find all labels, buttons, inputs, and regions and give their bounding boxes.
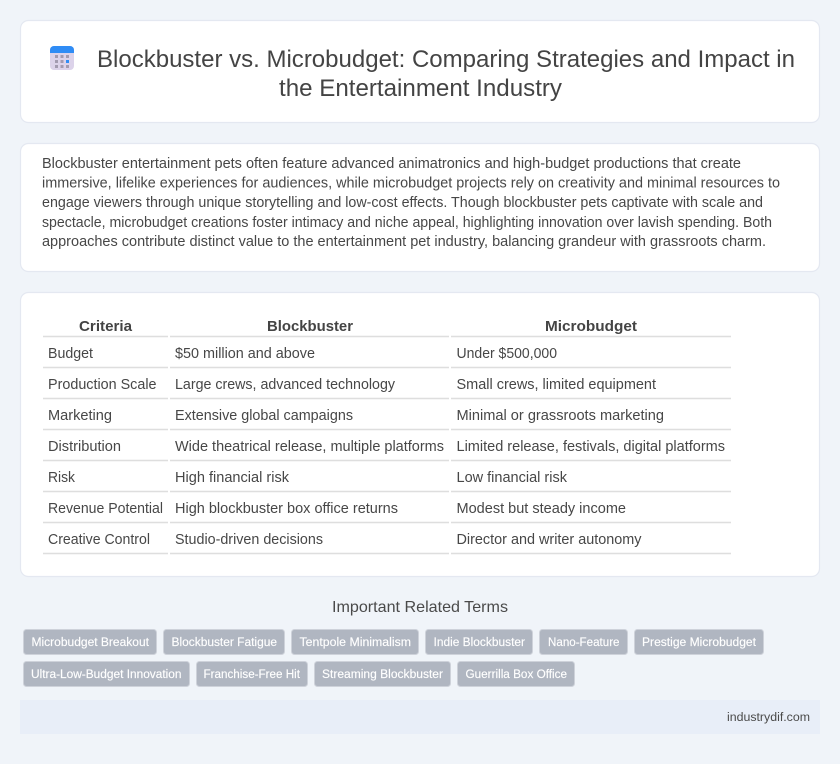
intro paragraph: spectacle, microbudget creations foster intimacy and niche appeal, highlighting innovation over lavish spending. Both — [42, 215, 772, 231]
row: revenue potential: Modest but steady income — [456, 501, 626, 517]
row: budget: $50 million and above — [175, 346, 315, 362]
row: creative control: Director and writer autonomy — [456, 532, 642, 548]
related term tags: Streaming Blockbuster — [322, 667, 443, 681]
icon: calendar — [50, 46, 74, 70]
row: revenue potential: High blockbuster box office returns — [175, 501, 398, 517]
intro paragraph — [42, 156, 780, 250]
row: budget: Budget — [48, 346, 93, 362]
row: production scale: Small crews, limited equipment — [456, 377, 656, 393]
row: creative control: Studio-driven decisions — [175, 532, 323, 548]
row: production scale — [48, 377, 656, 393]
footer bar: industrydif.com — [727, 710, 810, 724]
related term tags: Blockbuster Fatigue — [172, 635, 277, 649]
row: distribution — [48, 439, 725, 455]
related term tags — [24, 630, 764, 686]
related term tags: Tentpole Minimalism — [300, 635, 411, 649]
row: risk: Risk — [48, 470, 76, 486]
intro paragraph: approaches contribute distinct value to the entertainment pet industry, balancing grandeur with grassroots charm. — [42, 234, 766, 250]
row: budget — [48, 346, 557, 362]
intro paragraph: immersive, lifelike experiences for audiences, while microbudget projects rely on creativity and minimal resources to — [42, 176, 780, 192]
row: marketing: Extensive global campaigns — [175, 408, 353, 424]
row: creative control: Creative Control — [48, 532, 150, 548]
row: risk: High financial risk — [175, 470, 290, 486]
panel: intro text — [20, 144, 820, 272]
row: marketing: Marketing — [48, 408, 112, 424]
table header row: Criteria — [79, 318, 133, 335]
row: budget: Under $500,000 — [456, 346, 557, 362]
row: risk — [48, 470, 568, 486]
row: production scale: Production Scale — [48, 377, 156, 393]
panel: comparison table — [20, 292, 820, 576]
related term tags: Franchise-Free Hit — [204, 667, 301, 681]
title: the Entertainment Industry — [279, 75, 562, 102]
table header row — [79, 318, 637, 335]
row: distribution: Distribution — [48, 439, 121, 455]
intro paragraph: engage viewers through unique storytelling and low-cost effects. Though blockbuster pets captivate with scale and — [42, 195, 763, 211]
heading: related terms: Important Related Terms — [332, 599, 508, 616]
related term tags: Nano-Feature — [548, 635, 620, 649]
row: marketing: Minimal or grassroots marketing — [456, 408, 664, 424]
related term tags: Microbudget Breakout — [32, 635, 150, 649]
row: marketing — [48, 408, 664, 424]
row: distribution: Wide theatrical release, multiple platforms — [175, 439, 444, 455]
title — [97, 46, 795, 102]
related term tags: Guerrilla Box Office — [466, 667, 567, 681]
row: creative control — [48, 532, 642, 548]
related term tags: Indie Blockbuster — [434, 635, 525, 649]
row: revenue potential — [48, 501, 626, 517]
related term tags: Prestige Microbudget — [642, 635, 757, 649]
row: production scale: Large crews, advanced technology — [175, 377, 396, 393]
table header row: Blockbuster — [267, 318, 353, 335]
table header row: Microbudget — [545, 318, 637, 335]
title: Blockbuster vs. Microbudget: Comparing Strategies and Impact in — [97, 46, 795, 73]
row: distribution: Limited release, festivals, digital platforms — [456, 439, 725, 455]
panel: header — [20, 20, 820, 122]
row: risk: Low financial risk — [456, 470, 568, 486]
footer bar — [20, 700, 820, 734]
row: revenue potential: Revenue Potential — [48, 501, 163, 517]
related term tags: Ultra-Low-Budget Innovation — [31, 667, 182, 681]
intro paragraph: Blockbuster entertainment pets often feature advanced animatronics and high-budget productions that create — [42, 156, 741, 172]
